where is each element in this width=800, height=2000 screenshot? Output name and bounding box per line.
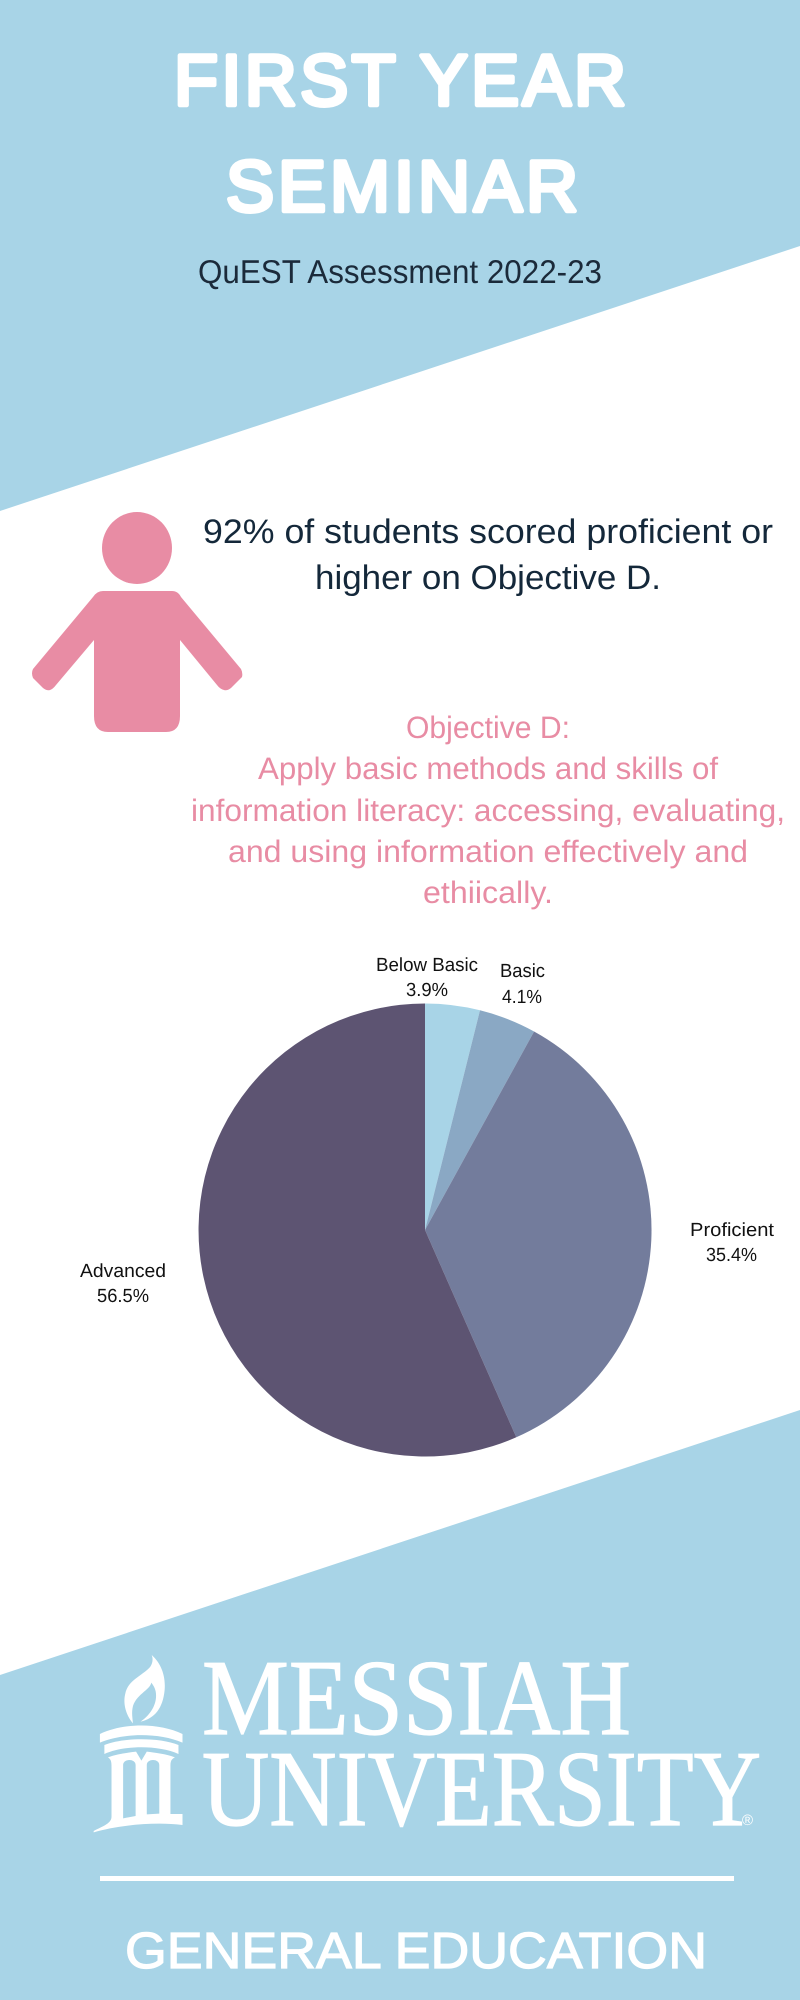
pie labels: 35.4% <box>706 1245 757 1266</box>
objective description: information literacy: accessing, evaluating, <box>191 793 785 828</box>
pie labels: 3.9% <box>406 980 448 1001</box>
title <box>174 41 626 227</box>
footer divider <box>100 1876 734 1881</box>
objective description: and using information effectively and <box>228 834 748 869</box>
objective description: ethiically. <box>423 875 553 910</box>
pie labels: Basic <box>500 961 545 982</box>
pie labels <box>80 955 775 1307</box>
title: FIRST YEAR <box>174 41 626 121</box>
footer label: general education: GENERAL EDUCATION <box>125 1922 707 1979</box>
panel: bottom blue footer background <box>0 1410 800 2000</box>
icon: person <box>32 512 242 732</box>
objective description <box>191 710 785 910</box>
icon: Messiah University torch logo <box>94 1655 182 1832</box>
title: SEMINAR <box>226 147 578 227</box>
panel: top blue header background <box>0 0 800 511</box>
pie labels: 56.5% <box>97 1286 149 1307</box>
pie labels: 4.1% <box>502 987 542 1008</box>
pie labels: Proficient <box>690 1220 775 1241</box>
pie labels: Advanced <box>80 1261 166 1282</box>
headline statistic: higher on Objective D. <box>315 559 661 597</box>
objective description: Objective D: <box>406 710 570 745</box>
headline statistic: 92% of students scored proficient or <box>203 513 773 551</box>
registered mark: ® <box>742 1812 753 1829</box>
university wordmark <box>202 1639 761 1849</box>
pie labels: Below Basic <box>376 955 478 976</box>
subtitle: QuEST Assessment 2022-23 <box>198 253 602 290</box>
headline statistic <box>203 513 773 597</box>
objective description: Apply basic methods and skills of <box>258 751 718 786</box>
pie chart <box>199 1004 652 1457</box>
university wordmark: MESSIAH <box>202 1639 631 1758</box>
